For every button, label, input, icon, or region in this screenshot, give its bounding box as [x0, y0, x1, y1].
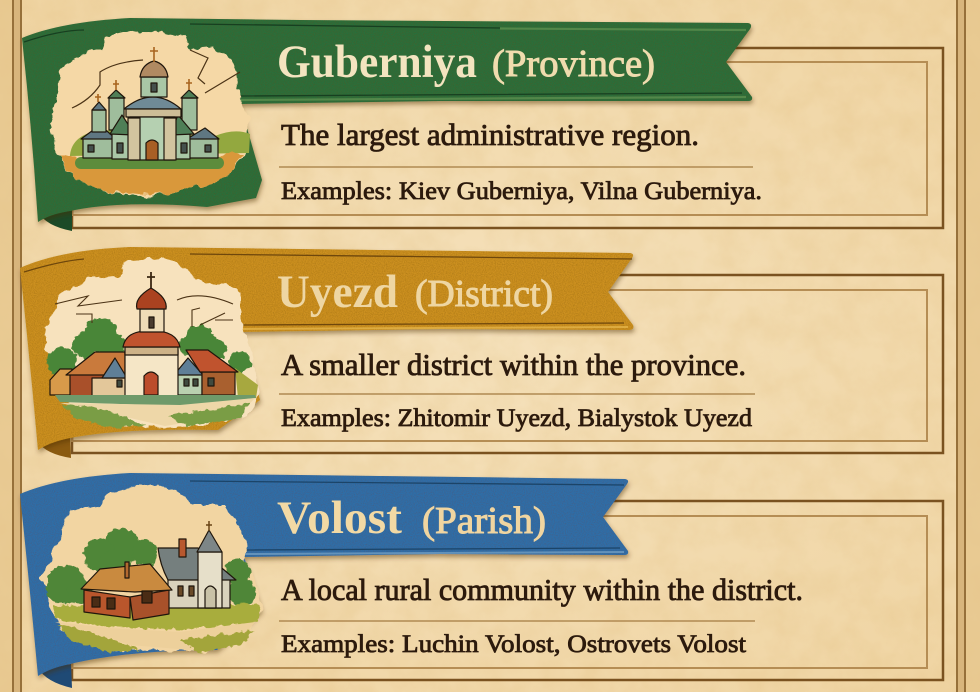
meadow	[235, 368, 258, 398]
heading: Guberniya	[277, 36, 655, 88]
heading: Volost: (Parish)	[422, 500, 546, 542]
heading: Guberniya: (Province)	[492, 43, 655, 85]
divider	[279, 166, 753, 168]
sketch lines	[55, 296, 233, 327]
illustration: Volost farmhouse and chapel	[42, 483, 262, 653]
cross	[206, 521, 212, 531]
divider	[279, 620, 755, 622]
orange ground	[60, 155, 243, 195]
divider	[279, 393, 755, 395]
cross	[147, 272, 155, 288]
cathedral	[81, 61, 219, 160]
grass	[62, 403, 250, 428]
text: Guberniya examples: Examples: Kiev Guberniya, Vilna Guberniya.	[281, 178, 762, 205]
page border: left	[13, 0, 21, 692]
crosses	[95, 47, 192, 102]
ribbon: Volost blue	[20, 473, 628, 688]
road	[55, 622, 255, 650]
chapel	[158, 530, 236, 608]
heading: Volost	[277, 492, 546, 544]
houses	[50, 288, 238, 396]
trees	[46, 528, 256, 606]
ribbon: Guberniya green	[22, 18, 752, 231]
illustration: Uyezd church and village	[45, 258, 258, 428]
sketch cracks	[72, 50, 240, 108]
torn sky patch	[42, 483, 262, 652]
heading: Volost: Volost	[277, 492, 402, 544]
green hills	[70, 130, 250, 156]
text: Uyezd examples: Examples: Zhitomir Uyezd, Bialystok Uyezd	[281, 405, 753, 432]
page border: right	[957, 0, 965, 692]
farmhouse	[81, 562, 172, 620]
green meadow	[52, 604, 260, 630]
panel: Guberniya frame	[72, 48, 943, 228]
trees	[47, 318, 251, 377]
heading: Uyezd: (District)	[415, 273, 553, 315]
text: Guberniya description: The largest administrative region.	[281, 117, 699, 152]
illustration: Guberniya cathedral	[50, 32, 250, 196]
grass strip	[75, 157, 224, 169]
torn sky patch	[45, 258, 258, 428]
panel: Volost frame	[72, 501, 943, 680]
text: Uyezd description: A smaller district within the province.	[281, 347, 746, 382]
ribbon: Uyezd gold	[20, 247, 633, 458]
grass	[58, 625, 255, 653]
heading: Uyezd	[277, 266, 553, 318]
text: Volost examples: Examples: Luchin Volost, Ostrovets Volost	[281, 631, 746, 658]
panel: Uyezd frame	[72, 275, 943, 453]
heading: Guberniya: Guberniya	[277, 36, 477, 88]
torn sky patch	[50, 32, 250, 196]
heading: Uyezd: Uyezd	[277, 266, 398, 318]
text: Volost description: A local rural community within the district.	[281, 572, 803, 607]
ground	[55, 395, 256, 406]
